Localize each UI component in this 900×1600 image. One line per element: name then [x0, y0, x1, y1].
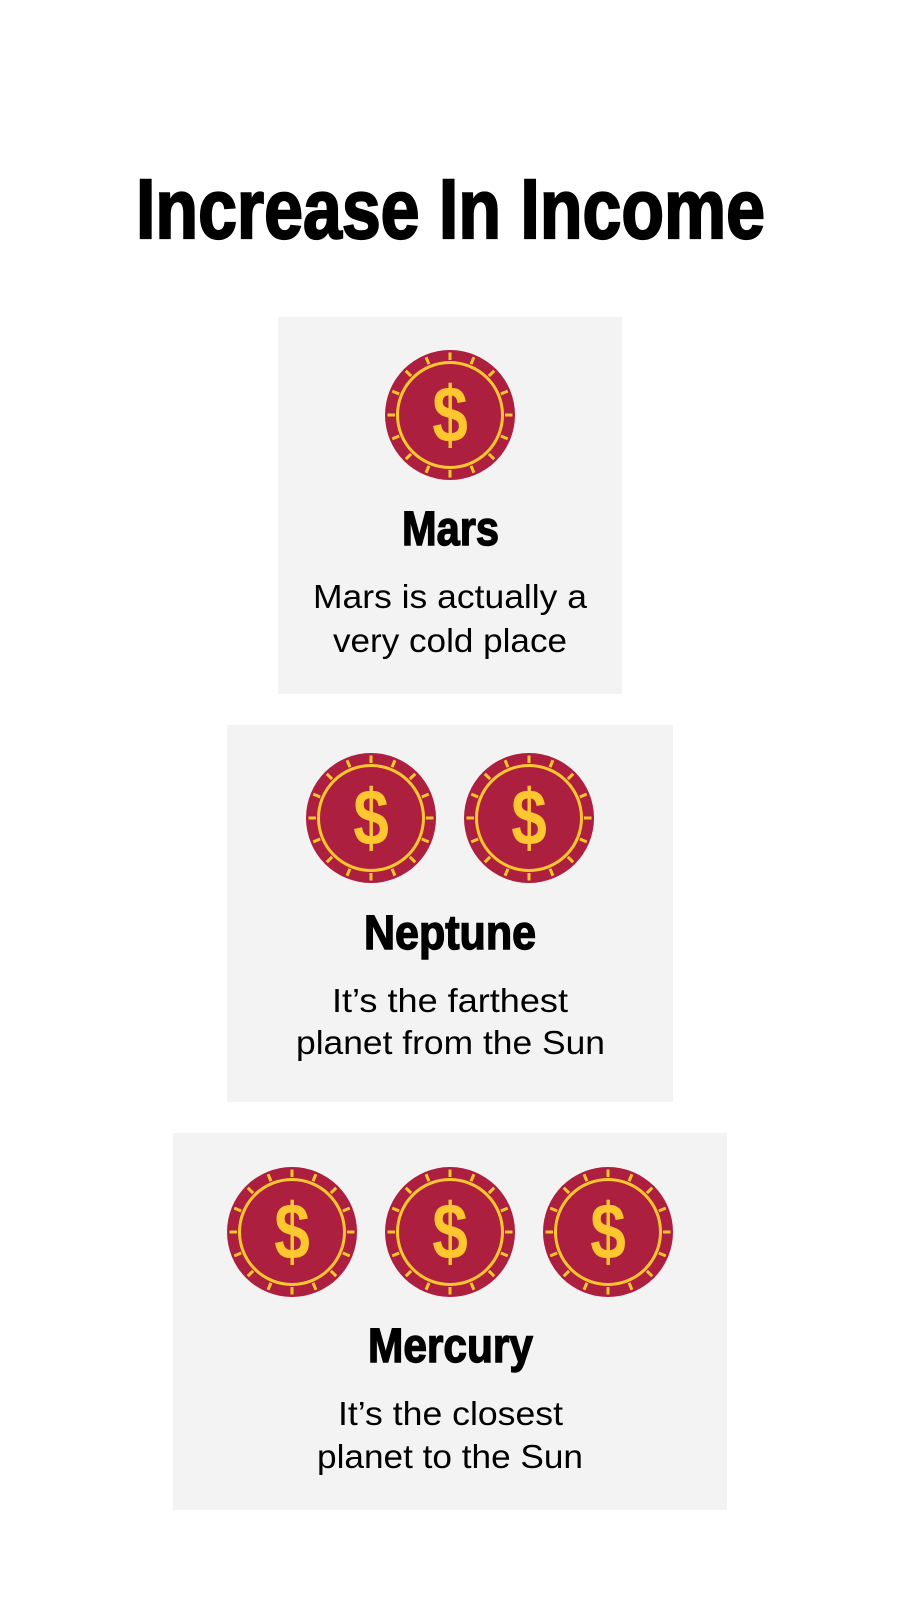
text block: Mercury description: It’s the closest: [338, 1396, 564, 1433]
text block: Neptune description: planet from the Sun: [296, 1025, 605, 1062]
icon: dollar coin 1: $: [353, 773, 389, 863]
panel: Mercury: [173, 1133, 727, 1510]
panel background: Neptune: [227, 725, 673, 1102]
text block: Mars description: [313, 579, 587, 660]
icon: dollar coin 2: [385, 1167, 515, 1297]
icon: dollar coin 1: $: [274, 1187, 310, 1277]
heading: Mars: Mars: [402, 503, 499, 556]
heading: Neptune: Neptune: [364, 907, 536, 960]
title: Increase In Income: [136, 162, 765, 256]
text block: Neptune description: It’s the farthest: [332, 983, 569, 1020]
icon: dollar coin 1: [227, 1167, 357, 1297]
icon: dollar coin 2: [464, 753, 594, 883]
panel background: Mercury: [173, 1133, 727, 1510]
text block: Mercury description: planet to the Sun: [317, 1439, 583, 1476]
panel: Neptune: [227, 725, 673, 1102]
icon: dollar coin: $: [432, 370, 468, 460]
icon: dollar coin 2: $: [432, 1187, 468, 1277]
text block: Neptune description: [296, 983, 605, 1062]
icon: dollar coin 2: $: [511, 773, 547, 863]
text block: Mars description: Mars is actually a: [313, 579, 587, 616]
icon: dollar coin 3: $: [590, 1187, 626, 1277]
text block: Mercury description: [317, 1396, 583, 1476]
icon: dollar coin 3: [543, 1167, 673, 1297]
text block: Mars description: very cold place: [333, 623, 567, 660]
panel: Mars: [278, 317, 622, 694]
icon: dollar coin: [385, 350, 515, 480]
heading: Mercury: Mercury: [368, 1320, 533, 1373]
panel background: Mars: [278, 317, 622, 694]
icon: dollar coin 1: [306, 753, 436, 883]
